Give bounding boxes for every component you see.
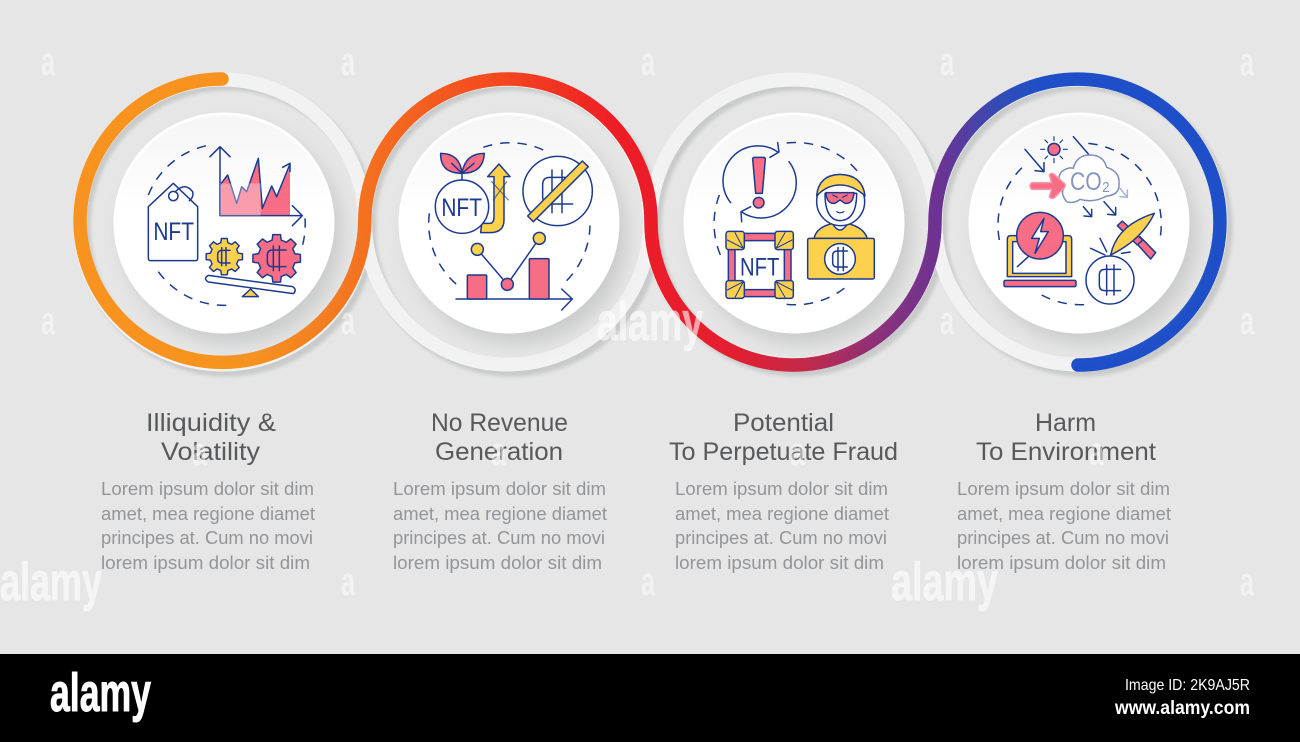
watermarks: a [1240,299,1254,343]
icon: CO2 cloud, energy-hungry laptop and mining pick: CO₂ [1070,169,1110,196]
heading: Harm To Environment [976,409,1156,466]
icon: CO2 cloud, energy-hungry laptop and mining pick [998,137,1161,305]
watermarks [0,40,1254,612]
heading: No Revenue Generation: Generation [435,438,563,466]
watermarks: a [1240,40,1254,84]
watermarks: alamy [0,552,102,612]
ghost rings [80,80,1220,364]
heading: Illiquidity & Volatility: Illiquidity & [146,409,276,437]
text block: column 2: principes at. Cum no movi [393,527,605,548]
heading: No Revenue Generation: No Revenue [431,409,568,437]
icon: NFT plant, crossed-out coin and revenue chart [429,143,592,310]
text block: column 2: Lorem ipsum dolor sit dim [393,478,606,499]
text block: column 1: lorem ipsum dolor sit dim [101,552,310,573]
watermarks: a [41,40,55,84]
watermarks: a [940,299,954,343]
icon: NFT tag, volatile chart and gears on a balance [148,145,305,305]
heading: Potential To Perpetuate Fraud [669,409,898,466]
watermarks: alamy [597,292,703,352]
flowing gradient line [80,79,1220,365]
heading: No Revenue Generation [431,409,568,466]
text block: column 2: amet, mea regione diamet [393,503,607,524]
disk shadows [122,124,1197,344]
watermarks: a [1240,560,1254,604]
text block: column 1: principes at. Cum no movi [101,527,313,548]
icon: NFT tag, volatile chart and gears on a balance: NFT [153,219,194,246]
watermarks: a [41,299,55,343]
heading: Illiquidity & Volatility [146,409,276,466]
text block: column 3: Lorem ipsum dolor sit dim [675,478,888,499]
text block: column 4 [957,478,1171,573]
text block: column 3: lorem ipsum dolor sit dim [675,552,884,573]
watermarks: a [341,560,355,604]
heading: Harm To Environment: Harm [1035,409,1096,437]
watermarks: a [641,40,655,84]
watermarks: a [940,40,954,84]
text block: column 3: amet, mea regione diamet [675,503,889,524]
watermarks: a [790,430,806,474]
text block: column 4: amet, mea regione diamet [957,503,1171,524]
text block: column 2 [393,478,607,573]
text block: column 3: principes at. Cum no movi [675,527,887,548]
text block: column 4: lorem ipsum dolor sit dim [957,552,1166,573]
watermarks: a [491,430,507,474]
text block: column 1: amet, mea regione diamet [101,503,315,524]
icon: fraud alert, NFT frame and hacker [714,143,874,305]
watermarks: a [192,430,208,474]
footer url: www.alamy.com [1114,698,1250,719]
watermarks: alamy [891,552,998,612]
watermarks: a [341,299,355,343]
heading: Harm To Environment: To Environment [976,438,1156,466]
text block: column 4: Lorem ipsum dolor sit dim [957,478,1170,499]
icon: NFT plant, crossed-out coin and revenue chart: NFT [441,195,482,222]
footer image id: Image ID: 2K9AJ5R [1125,677,1250,694]
heading: Potential To Perpetuate Fraud: Potential [733,409,834,437]
text block: column 1: Lorem ipsum dolor sit dim [101,478,314,499]
icon: fraud alert, NFT frame and hacker: NFT [740,255,779,282]
footer logo: alamy [50,663,151,723]
ring shadows [84,84,1226,370]
footer bar [0,654,1300,742]
heading: Illiquidity & Volatility: Volatility [161,438,261,466]
text block: column 4: principes at. Cum no movi [957,527,1169,548]
watermarks: a [1089,430,1105,474]
text block: column 3 [675,478,889,573]
text block: column 2: lorem ipsum dolor sit dim [393,552,602,573]
text block: column 1 [101,478,315,573]
watermarks: a [641,560,655,604]
white disks [115,114,1188,332]
watermarks: a [341,40,355,84]
heading: Potential To Perpetuate Fraud: To Perpetuate Fraud [669,438,898,466]
